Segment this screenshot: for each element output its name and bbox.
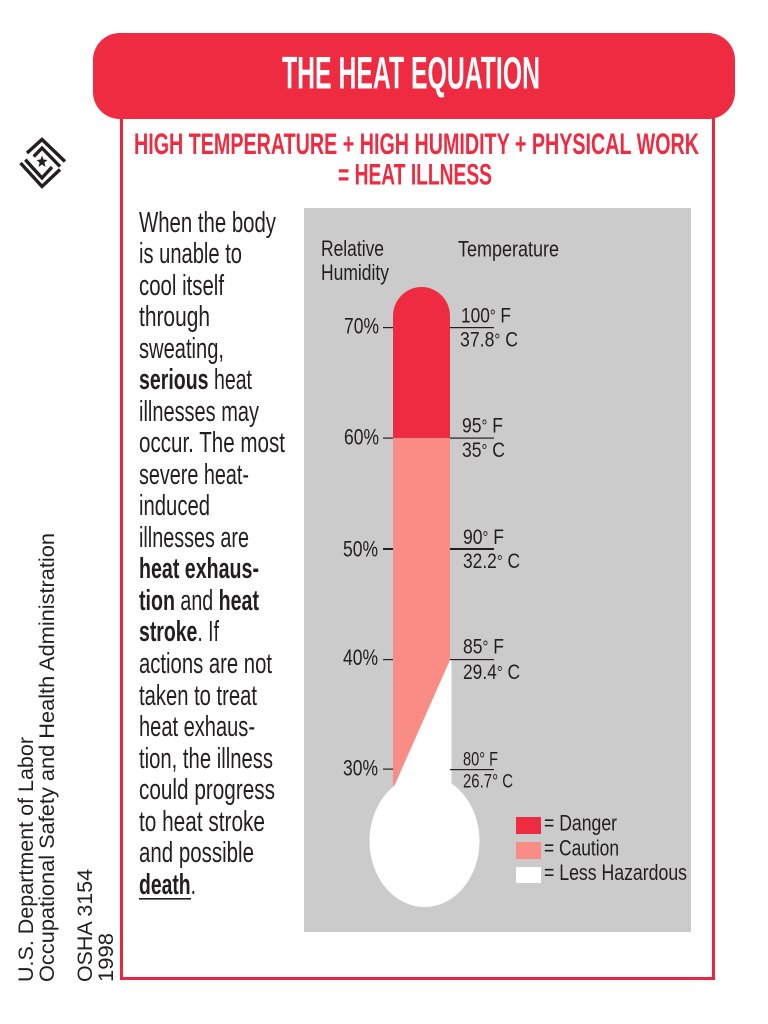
text block: heat illness explanation: taken to treat (139, 680, 257, 712)
heading: heat equation formula: = HEAT ILLNESS (338, 158, 492, 192)
title: THE HEAT EQUATION (282, 48, 540, 98)
text block: heat illness explanation: serious heat (139, 364, 252, 396)
text block: heat illness explanation: through (139, 301, 210, 333)
legend: = Danger (544, 811, 617, 836)
humidity scale: 60% (344, 424, 379, 449)
legend: = Less Hazardous (544, 860, 687, 885)
temperature scale: 35° C (462, 438, 505, 462)
side text: agency credit (14, 533, 118, 982)
humidity scale: 40% (343, 645, 378, 670)
temperature scale: 100° F (461, 304, 511, 328)
text block: heat illness explanation: When the body (139, 207, 276, 239)
axis headings: Temperature (458, 237, 559, 262)
side text: agency credit: U.S. Department of Labor (14, 737, 38, 982)
temperature scale: 26.7° C (463, 770, 513, 792)
text block: heat illness explanation: could progress (139, 774, 275, 806)
humidity scale: 50% (343, 537, 378, 562)
title banner (93, 33, 735, 119)
temperature scale: 80° F (463, 749, 498, 771)
text block: heat illness explanation: heat exhaus- (139, 711, 255, 743)
text block: heat illness explanation: is unable to (139, 238, 242, 270)
humidity scale: 30% (343, 756, 378, 781)
text block: heat illness explanation: and possible (139, 837, 254, 869)
humidity scale: 70% (344, 313, 379, 338)
text block: heat illness explanation: induced (139, 490, 210, 522)
text block: heat illness explanation: heat exhaus- (139, 553, 259, 585)
humidity scale (343, 313, 393, 781)
text block: heat illness explanation: cool itself (139, 270, 225, 302)
text block: heat illness explanation: stroke. If (139, 616, 220, 648)
temperature scale: 37.8° C (460, 328, 518, 352)
text block: heat illness explanation: actions are not (139, 648, 272, 680)
text block: heat illness explanation: illnesses may (139, 396, 259, 428)
side text: agency credit: 1998 (94, 933, 118, 982)
temperature scale: 32.2° C (463, 549, 520, 573)
danger zone (393, 287, 450, 438)
text block: heat illness explanation: death. (139, 869, 196, 901)
side text: agency credit: Occupational Safety and Health Administration (35, 533, 59, 982)
side text: agency credit: OSHA 3154 (73, 869, 97, 982)
caution zone (393, 438, 450, 786)
text block: heat illness explanation: tion, the illness (139, 743, 273, 775)
text block: heat illness explanation: occur. The most (139, 427, 285, 459)
heading: heat equation formula (134, 128, 699, 192)
temperature scale (450, 304, 520, 792)
text block: heat illness explanation: illnesses are (139, 522, 249, 554)
temperature scale: 29.4° C (463, 660, 520, 684)
temperature scale: 85° F (463, 635, 504, 659)
text block: heat illness explanation: to heat stroke (139, 806, 265, 838)
outer red frame (122, 100, 714, 978)
legend (516, 811, 687, 885)
temperature scale: 90° F (463, 525, 504, 549)
text block: heat illness explanation (139, 207, 285, 901)
text block: heat illness explanation: tion and heat (139, 585, 259, 617)
panel: thermometer chart (304, 208, 691, 932)
icon: Department of Labor logo (20, 140, 65, 186)
legend: = Caution (544, 836, 619, 861)
axis headings (321, 236, 559, 285)
less hazardous zone (370, 660, 480, 907)
temperature scale: 95° F (462, 413, 503, 437)
text block: heat illness explanation: sweating, (139, 333, 224, 365)
thermometer (370, 287, 480, 907)
axis headings: Humidity (321, 260, 389, 285)
text block: heat illness explanation: severe heat- (139, 459, 249, 491)
axis headings: Relative (321, 236, 384, 261)
